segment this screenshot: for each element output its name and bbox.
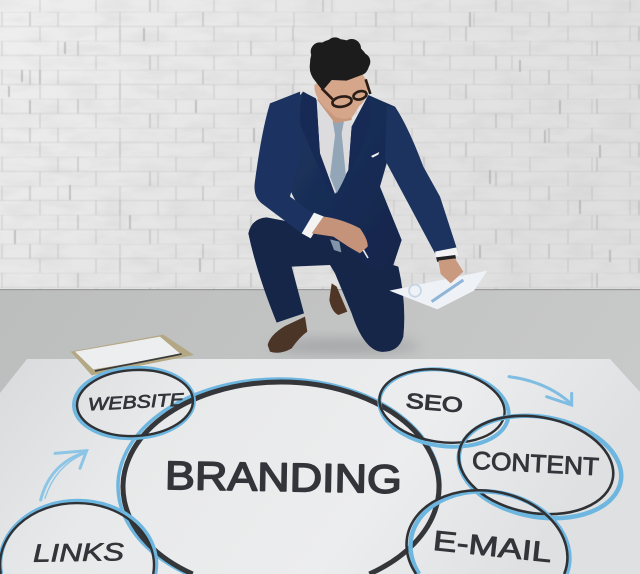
- circle: content: [451, 404, 629, 530]
- left hand: [312, 217, 368, 253]
- arrow: right blue sketch arrow: [509, 377, 572, 405]
- shirt: [317, 96, 352, 194]
- lapels: [298, 92, 372, 195]
- right hand: [438, 258, 463, 283]
- tie: [330, 121, 346, 193]
- businessman: [248, 37, 487, 353]
- floor: [0, 289, 640, 574]
- lower tie end: [330, 239, 341, 252]
- text: links: LINKS: [33, 538, 125, 568]
- text: website: WEBSITE: [88, 389, 186, 414]
- pocket square: [371, 152, 379, 158]
- back shoe: [329, 283, 347, 315]
- circle: branding: [118, 379, 440, 574]
- circle: website: [72, 365, 196, 441]
- left cuff: [302, 213, 324, 238]
- text: branding: BRANDING: [165, 454, 402, 502]
- jacket torso: [277, 92, 402, 275]
- left shoe: [268, 317, 307, 353]
- pen: [363, 250, 368, 258]
- hair: [310, 37, 370, 91]
- left arm: [254, 92, 315, 233]
- circle: e-mail: [407, 490, 569, 574]
- right cuff: [435, 247, 458, 259]
- large branding paper: [0, 359, 640, 574]
- arrow: left blue sketch arrow: [41, 451, 87, 500]
- text: seo: SEO: [405, 390, 464, 417]
- diagram circles: [0, 361, 629, 574]
- text: content: CONTENT: [471, 447, 600, 481]
- brick wall: [0, 0, 640, 291]
- neck: [317, 95, 352, 123]
- trousers: [248, 217, 404, 352]
- watch: [436, 255, 456, 262]
- right arm: [385, 106, 457, 253]
- clipboard: [71, 335, 194, 375]
- glasses: [322, 79, 370, 108]
- held document: [389, 271, 487, 309]
- face: [314, 70, 368, 119]
- circle: links: [0, 501, 156, 574]
- floor shadow: [270, 339, 420, 353]
- text: e-mail: E-MAIL: [432, 525, 553, 568]
- circle: seo: [374, 361, 514, 455]
